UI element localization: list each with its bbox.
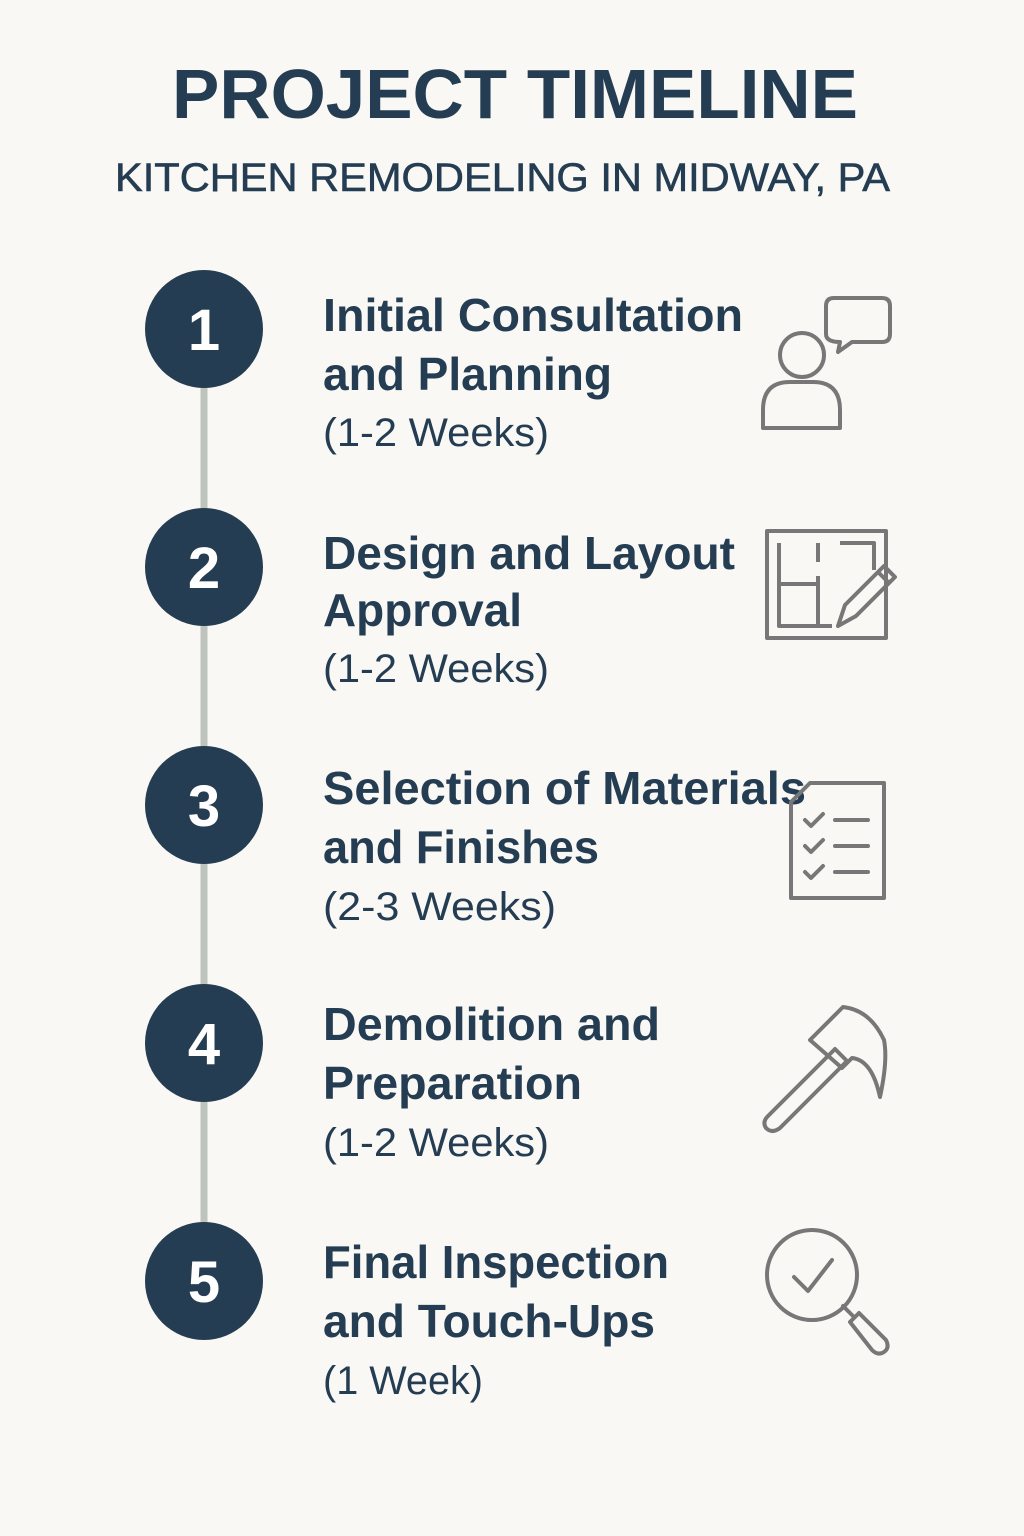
step 5: (1 Week) [323, 1359, 483, 1403]
timeline line [200, 329, 208, 1281]
step 2: 2 [188, 536, 220, 601]
step 4: (1-2 Weeks) [323, 1121, 549, 1165]
step 4: Demolition and [323, 998, 660, 1050]
step 2: Approval [323, 584, 522, 636]
icon: blueprint with pencil [767, 531, 895, 638]
icon: magnifier with check [767, 1230, 888, 1354]
step 4: Preparation [323, 1057, 582, 1109]
step 5: and Touch-Ups [323, 1295, 655, 1347]
step 5: Final Inspection [323, 1236, 669, 1288]
step 2: (1-2 Weeks) [323, 647, 549, 691]
step 3: and Finishes [323, 821, 599, 873]
step 4 [145, 984, 660, 1165]
step 3: (2-3 Weeks) [323, 885, 556, 929]
step 3: Selection of Materials [323, 762, 806, 814]
subtitle: KITCHEN REMODELING IN MIDWAY, PA [115, 156, 890, 200]
step 1: 1 [188, 298, 220, 363]
step 3 [145, 746, 806, 929]
icon: person with speech bubble [763, 298, 890, 428]
step 1: (1-2 Weeks) [323, 411, 549, 455]
icon: hammer [764, 1007, 885, 1131]
icon: checklist [791, 783, 884, 898]
title: PROJECT TIMELINE [172, 55, 858, 133]
step 2: Design and Layout [323, 527, 735, 579]
step 1: and Planning [323, 348, 612, 400]
step 1: Initial Consultation [323, 289, 743, 341]
step 5 [145, 1222, 669, 1403]
step 1 [145, 270, 743, 455]
step 5: 5 [188, 1250, 220, 1315]
step 3: 3 [188, 774, 220, 839]
step 2 [145, 508, 735, 691]
step 4: 4 [188, 1012, 220, 1077]
